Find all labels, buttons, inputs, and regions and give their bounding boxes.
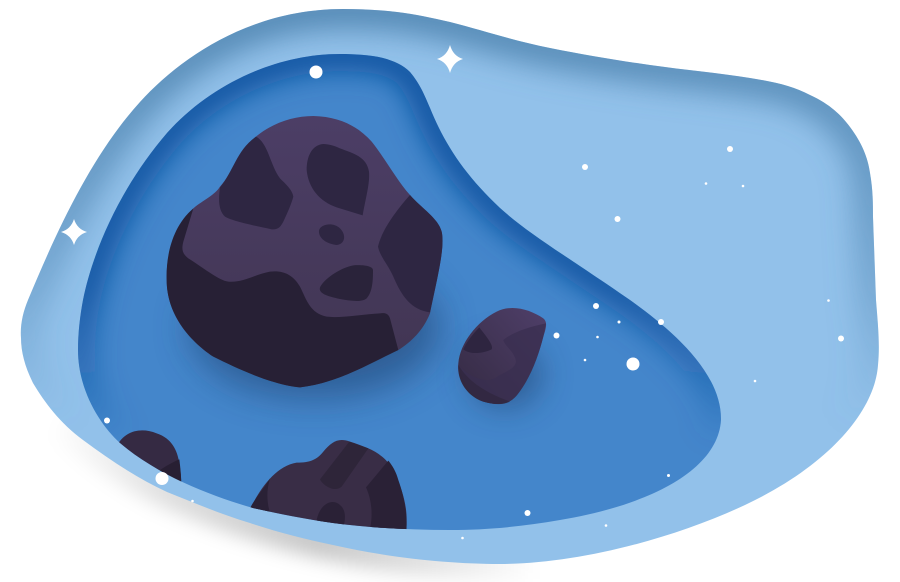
outer edge shading	[20, 9, 879, 374]
asteroid: main	[167, 116, 443, 387]
sparkle: left	[61, 219, 87, 245]
shadow: small asteroid	[467, 341, 543, 409]
shadow: main asteroid	[190, 258, 440, 398]
crater small	[319, 224, 344, 245]
inner deep blue blob	[78, 54, 721, 550]
ground shadow	[60, 425, 530, 563]
crater top-left	[219, 137, 293, 229]
asteroid: small	[458, 308, 546, 404]
crater lower	[320, 265, 373, 301]
sparkle: top	[437, 45, 463, 73]
asteroid: bottom centre	[250, 440, 407, 530]
inner edge shading	[78, 54, 721, 418]
crater top-centre	[307, 144, 369, 215]
crater right	[378, 195, 443, 312]
asteroid: bottom left	[119, 430, 182, 482]
asteroid lower dark area	[167, 208, 398, 387]
stars: white dots	[104, 66, 844, 539]
